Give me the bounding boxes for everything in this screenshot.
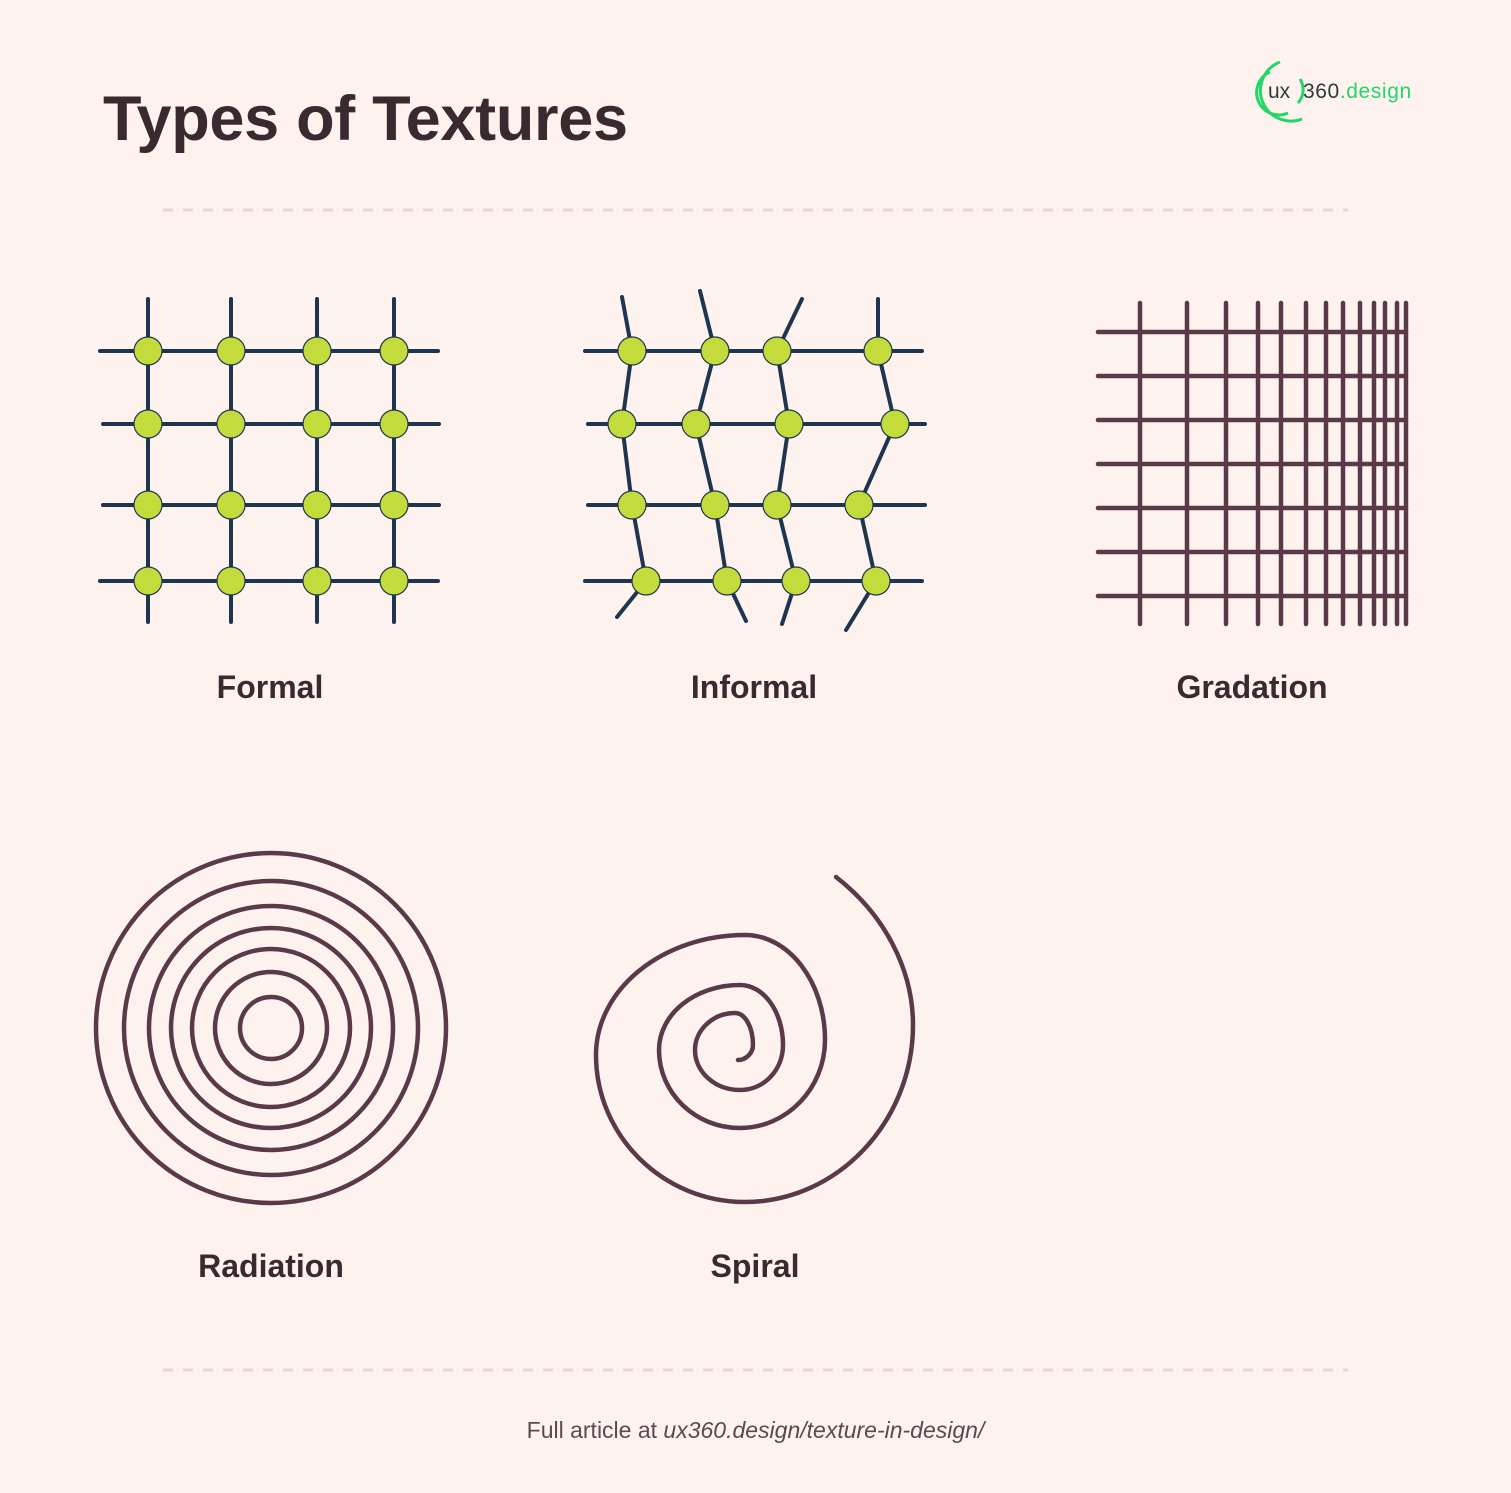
title: Types of Textures (103, 84, 628, 154)
logo: ux (1268, 80, 1291, 103)
panel: radiation (94, 850, 448, 1206)
panel: gradation (1096, 300, 1408, 626)
label: radiation: Radiation (198, 1248, 344, 1284)
divider bottom (163, 1368, 1348, 1372)
logo: 360.design (1303, 80, 1412, 103)
footer: Full article at ux360.design/texture-in-design/ (527, 1417, 984, 1443)
label: formal: Formal (217, 669, 323, 705)
panel: spiral (594, 874, 916, 1204)
logo (1255, 60, 1412, 123)
divider top (163, 208, 1348, 212)
label: spiral: Spiral (711, 1248, 799, 1284)
panel: informal (583, 289, 927, 632)
label: gradation: Gradation (1176, 669, 1328, 705)
panel: formal (98, 297, 441, 624)
label: informal: Informal (691, 669, 817, 705)
